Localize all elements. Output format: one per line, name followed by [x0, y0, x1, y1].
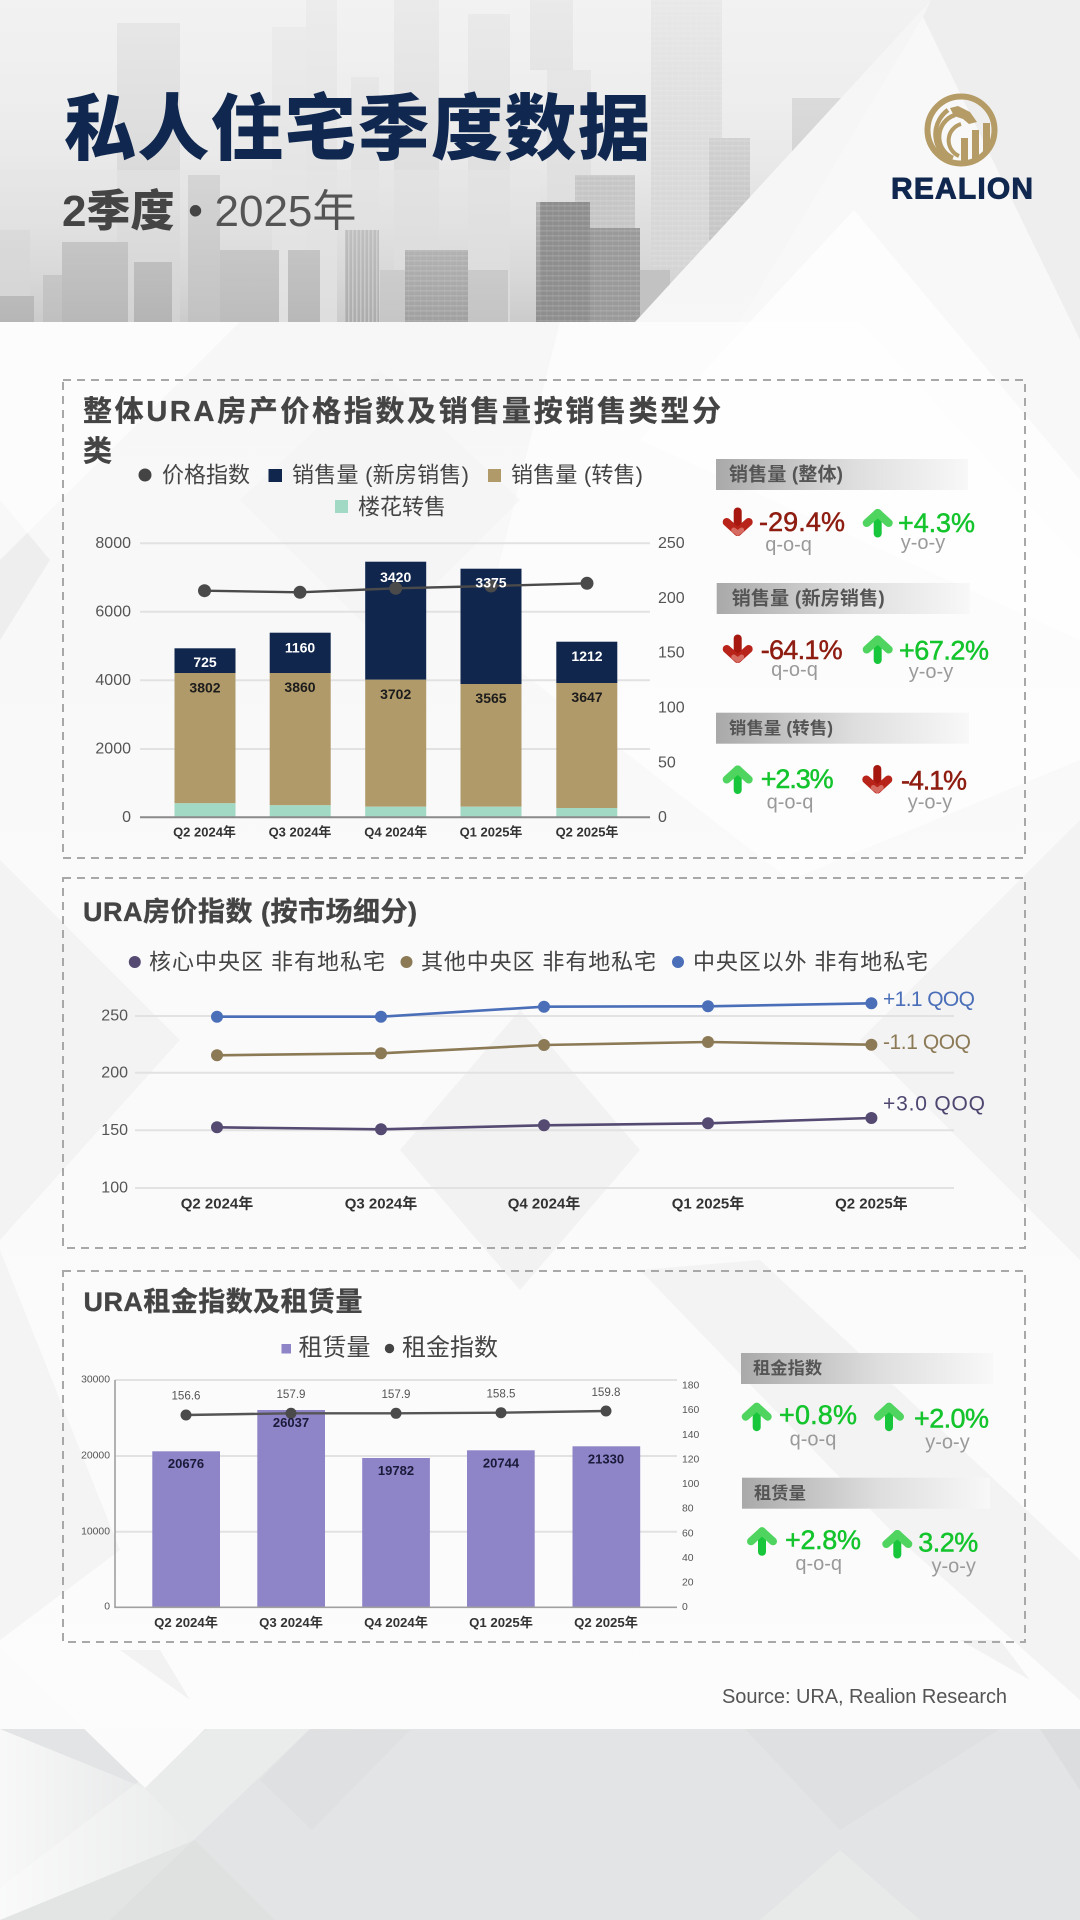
- bars: Q3 2024: [270, 633, 331, 817]
- combo chart: 10000: [81, 1526, 110, 1538]
- chart legend: 楼花转售: [358, 494, 446, 520]
- logo: [891, 96, 1033, 206]
- category labels: Q4 2024年: [508, 1194, 580, 1212]
- icon: up arrow: [886, 1534, 908, 1554]
- stat: rental volume: 3.2%: [918, 1528, 978, 1558]
- stacked bar chart with price index line: 50: [658, 754, 676, 772]
- bar value labels: 3420: [380, 569, 411, 585]
- chart legend: 销售量 (新房销售): [292, 462, 469, 488]
- stacked bar chart with price index line: 150: [658, 644, 685, 662]
- source note: Source: URA, Realion Research: [722, 1686, 1007, 1708]
- bars: Q4 2024: [365, 562, 426, 817]
- stat: rent index: y-o-y: [925, 1432, 970, 1454]
- subtitle: 2季度 • 2025年: [62, 186, 356, 236]
- panel heading: 整体URA房产价格指数及销售量按销售类型分: [83, 395, 721, 428]
- stacked bar chart with price index line: 100: [658, 700, 685, 716]
- chart legend: 销售量 (转售): [511, 462, 643, 488]
- chart legend: 租金指数: [402, 1334, 498, 1362]
- rent index line: [180, 1406, 612, 1420]
- header skyline photo: [0, 0, 931, 322]
- title: 私人住宅季度数据: [64, 90, 651, 170]
- bar value labels: 19782: [378, 1463, 414, 1478]
- stat: resale: 销售量 (转售): [729, 718, 833, 738]
- icon: up arrow: [867, 513, 889, 534]
- panel heading: URA租金指数及租赁量: [84, 1287, 362, 1317]
- stat: resale: q-o-q: [767, 792, 813, 814]
- line chart: 200: [101, 1064, 128, 1082]
- price index line: [198, 577, 594, 599]
- stat: new sales: -64.1%: [761, 635, 843, 665]
- footer band: [0, 1647, 1080, 1920]
- stat: rental volume: 租赁量: [754, 1483, 806, 1503]
- chart legend: 核心中央区 非有地私宅: [149, 950, 385, 974]
- category labels: Q2 2025年: [835, 1194, 908, 1212]
- stacked bar chart with price index line: 6000: [95, 604, 131, 620]
- chart legend: 其他中央区 非有地私宅: [421, 950, 656, 974]
- stat: new sales: [717, 583, 989, 683]
- rental volume bars: [152, 1410, 640, 1607]
- stat: total sales: [716, 459, 975, 556]
- bar value labels: 3375: [475, 574, 507, 590]
- stacked bar chart with price index line: 200: [658, 590, 685, 607]
- icon: up arrow: [746, 1407, 768, 1427]
- icon: down arrow: [727, 512, 749, 533]
- category labels: Q1 2025年: [469, 1614, 533, 1630]
- stat: resale: [716, 713, 969, 814]
- stacked bar chart with price index line: 8000: [95, 535, 131, 552]
- category labels: Q2 2024年: [154, 1614, 218, 1630]
- combo chart: 140: [682, 1430, 700, 1441]
- combo chart: 120: [682, 1454, 700, 1466]
- combo chart: [81, 1374, 700, 1630]
- line chart: 100: [101, 1180, 128, 1196]
- stat: new sales: q-o-q: [771, 659, 818, 681]
- bar value labels: 21330: [588, 1452, 624, 1466]
- series annotations: [883, 988, 985, 1116]
- icon: gold lion emblem: [928, 96, 994, 164]
- bar value labels: 20676: [168, 1456, 204, 1471]
- icon: down arrow: [866, 769, 888, 790]
- combo chart: 160: [682, 1405, 700, 1416]
- panel heading: [83, 395, 721, 468]
- stat: rent index: [741, 1353, 993, 1454]
- stat: new sales: 销售量 (新房销售): [732, 588, 885, 610]
- series: outside central region: [211, 997, 877, 1023]
- stat: rental volume: [742, 1478, 990, 1578]
- category labels: [181, 1194, 908, 1212]
- bars: Q2 2024: [174, 648, 236, 817]
- bar value labels: 3702: [380, 686, 411, 702]
- series annotations: +1.1 QOQ: [883, 988, 975, 1011]
- stacked bar chart with price index line: 2000: [95, 740, 131, 758]
- combo chart: 100: [682, 1479, 700, 1490]
- series annotations: -1.1 QOQ: [883, 1031, 971, 1054]
- stacked bar chart with price index line: 4000: [95, 672, 131, 689]
- category labels: Q1 2025年: [460, 824, 522, 840]
- rent index labels: 157.9: [276, 1388, 306, 1401]
- stat: rent index: +0.8%: [779, 1400, 857, 1430]
- stat: total sales: q-o-q: [765, 534, 812, 556]
- panel: URA price index by market segment: [63, 878, 1025, 1248]
- chart legend: 价格指数: [162, 462, 250, 488]
- rent index labels: 159.8: [591, 1386, 621, 1399]
- combo chart: 30000: [81, 1374, 110, 1386]
- stat: rent index: 租金指数: [753, 1358, 822, 1378]
- category labels: Q3 2024年: [269, 824, 331, 840]
- bars: Q2 2025: [556, 642, 617, 817]
- combo chart: 180: [682, 1380, 700, 1392]
- panel: overall price index and sales: [63, 380, 1025, 858]
- bars: Q1 2025: [460, 569, 522, 817]
- series: rest of central region: [211, 1036, 877, 1061]
- stat: resale: -4.1%: [901, 766, 967, 796]
- category labels: Q2 2025年: [556, 824, 618, 840]
- rent index labels: 156.6: [171, 1390, 201, 1402]
- combo chart: 60: [682, 1528, 694, 1539]
- stat: rent index: +2.0%: [914, 1403, 989, 1433]
- category labels: Q4 2024年: [364, 1614, 428, 1630]
- chart legend: 中央区以外 非有地私宅: [693, 950, 928, 974]
- category labels: Q3 2024年: [259, 1614, 323, 1630]
- panel: rent index and rental volume: [63, 1271, 1025, 1642]
- stat: rental volume: q-o-q: [795, 1553, 842, 1575]
- bar value labels: 20744: [483, 1456, 520, 1470]
- stat: total sales: 销售量 (整体): [729, 464, 843, 486]
- bar value labels: 3802: [189, 680, 221, 696]
- stat: total sales: y-o-y: [901, 532, 945, 554]
- rent index labels: 157.9: [381, 1388, 411, 1401]
- stat: rent index: q-o-q: [790, 1428, 836, 1450]
- line chart: [101, 988, 985, 1212]
- combo chart: 0: [682, 1602, 688, 1613]
- series annotations: +3.0 QOQ: [883, 1092, 985, 1116]
- stacked bar chart with price index line: [95, 535, 685, 840]
- combo chart: 20000: [81, 1450, 110, 1462]
- chart legend: [138, 462, 643, 520]
- category labels: Q4 2024年: [364, 824, 427, 840]
- logo wordmark: REALION: [891, 172, 1033, 206]
- icon: up arrow: [867, 640, 889, 660]
- category labels: Q3 2024年: [345, 1194, 417, 1212]
- bar value labels: 725: [193, 654, 217, 670]
- line chart: 150: [101, 1122, 128, 1139]
- stat: new sales: y-o-y: [909, 661, 953, 683]
- stacked bar chart with price index line: 0: [658, 809, 667, 826]
- stat: rental volume: +2.8%: [785, 1525, 861, 1555]
- bar value labels: 3647: [571, 689, 603, 705]
- bar value labels: 1160: [285, 640, 315, 656]
- category labels: Q2 2025年: [574, 1614, 638, 1630]
- category labels: [154, 1614, 638, 1630]
- bar value labels: 3565: [475, 690, 507, 706]
- stat: resale: y-o-y: [908, 792, 952, 814]
- bar value labels: [168, 1415, 624, 1478]
- rent index labels: 158.5: [486, 1388, 516, 1400]
- combo chart: 40: [682, 1553, 694, 1564]
- panel heading: 类: [83, 435, 112, 468]
- category labels: Q2 2024年: [173, 824, 236, 840]
- series: core central region: [211, 1112, 877, 1135]
- stat: rental volume: y-o-y: [931, 1556, 976, 1578]
- rent index labels: [171, 1386, 621, 1402]
- stat: resale: +2.3%: [761, 764, 834, 794]
- icon: up arrow: [751, 1531, 773, 1552]
- stacked bar chart with price index line: 0: [122, 809, 131, 826]
- bar value labels: 1212: [571, 648, 603, 664]
- bar value labels: 26037: [273, 1415, 309, 1430]
- combo chart: 20: [682, 1578, 694, 1588]
- icon: up arrow: [878, 1407, 900, 1427]
- chart legend: 租赁量: [298, 1334, 370, 1362]
- category labels: [173, 824, 618, 840]
- combo chart: 0: [104, 1602, 110, 1612]
- chart legend: [282, 1334, 498, 1362]
- stat: total sales: +4.3%: [898, 508, 975, 538]
- category labels: Q2 2024年: [181, 1194, 253, 1212]
- bar value labels: [189, 569, 603, 706]
- bar value labels: 3860: [284, 679, 316, 695]
- icon: down arrow: [727, 638, 749, 660]
- combo chart: 80: [682, 1504, 694, 1515]
- panel heading: URA房价指数 (按市场细分): [83, 897, 417, 927]
- stat: total sales: -29.4%: [759, 507, 845, 537]
- line chart: 250: [101, 1008, 128, 1024]
- stacked bar chart with price index line: 250: [658, 535, 685, 552]
- category labels: Q1 2025年: [672, 1194, 744, 1212]
- icon: up arrow: [727, 770, 749, 790]
- chart legend: [129, 950, 928, 974]
- stat: new sales: +67.2%: [899, 636, 989, 666]
